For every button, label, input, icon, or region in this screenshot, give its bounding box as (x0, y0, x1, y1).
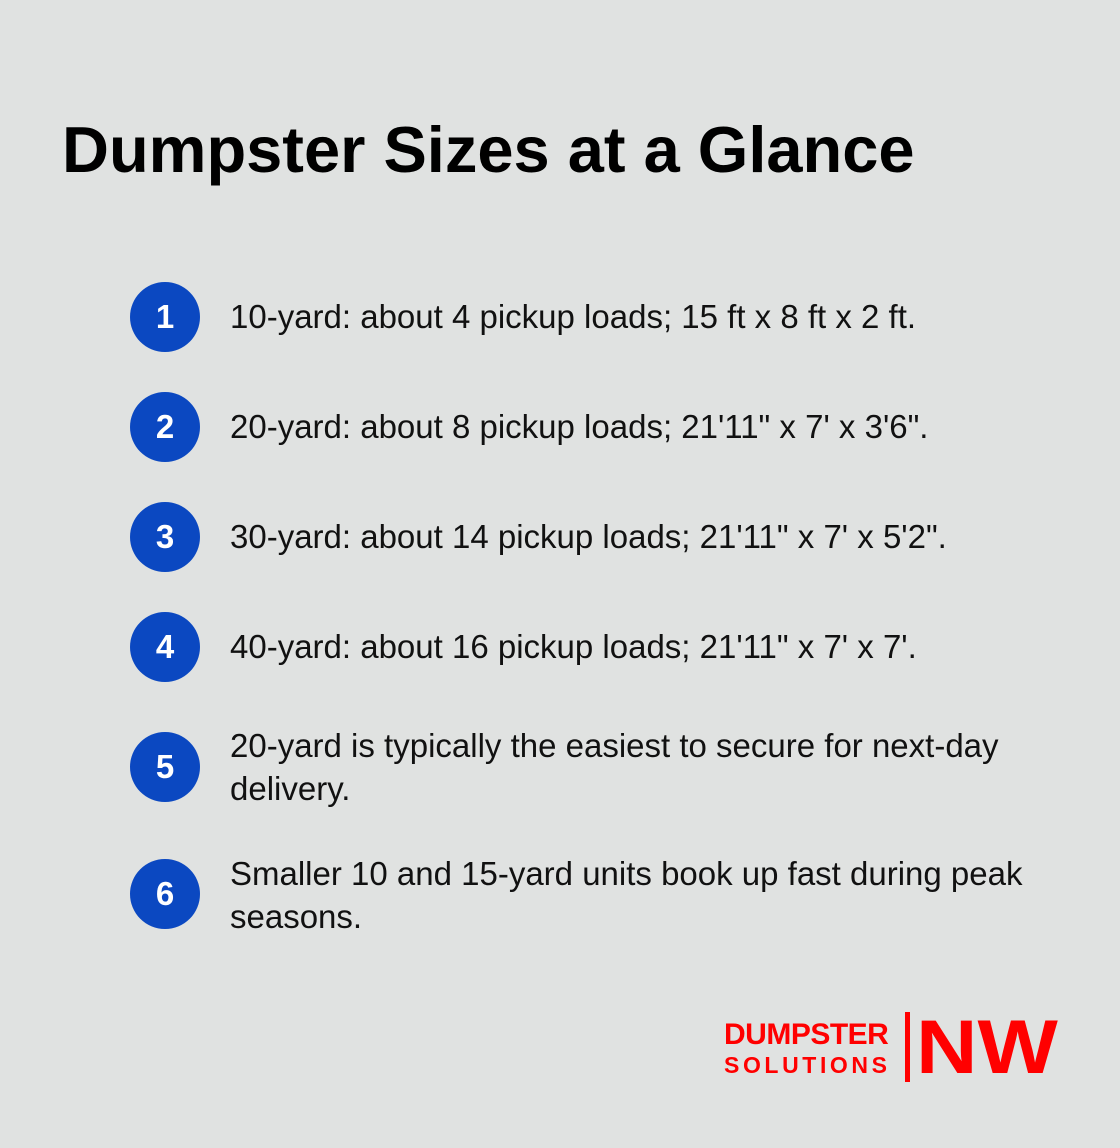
item 3: 30-yard: about 14 pickup loads; 21'11" x 7' x 5'2". (230, 518, 947, 555)
item 5: 20-yard is typically the easiest to secure for next-day delivery. (230, 727, 999, 807)
logo: SOLUTIONS (724, 1052, 891, 1078)
logo: DUMPSTER (724, 1018, 888, 1051)
item 1: 1 (156, 298, 174, 335)
item 1 (130, 282, 916, 352)
item 2: 20-yard: about 8 pickup loads; 21'11" x 7' x 3'6". (230, 408, 928, 445)
item 6: Smaller 10 and 15-yard units book up fast during peak seasons. (230, 855, 1022, 935)
item 5: 5 (156, 748, 174, 785)
item 4: 4 (156, 628, 174, 665)
item 6: 6 (156, 875, 174, 912)
item 3 (130, 502, 947, 572)
logo: NW (916, 1005, 1058, 1090)
item 1: 10-yard: about 4 pickup loads; 15 ft x 8 ft x 2 ft. (230, 298, 916, 335)
item 3: 3 (156, 518, 174, 555)
logo (724, 1005, 1058, 1090)
item 4 (130, 612, 917, 682)
title: Dumpster Sizes at a Glance (62, 113, 915, 186)
item 4: 40-yard: about 16 pickup loads; 21'11" x 7' x 7'. (230, 628, 917, 665)
item 2: 2 (156, 408, 174, 445)
item 2 (130, 392, 928, 462)
